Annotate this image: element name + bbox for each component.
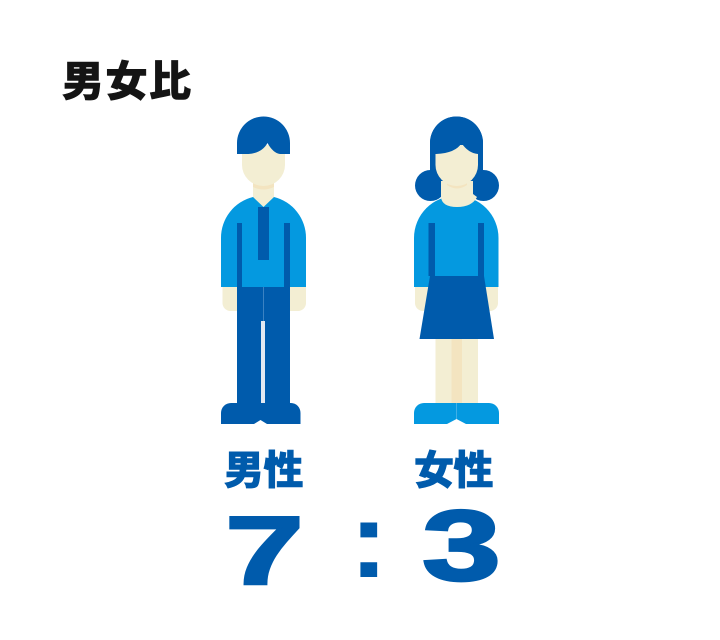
female hair back	[415, 116, 499, 201]
female shoes	[414, 403, 499, 424]
male hair	[237, 116, 290, 154]
male face	[242, 145, 285, 186]
female face	[436, 145, 478, 186]
ratio number 3: 3	[422, 490, 501, 602]
male trousers	[237, 287, 290, 403]
male neck	[253, 175, 274, 209]
female sleeve lines	[428, 223, 484, 276]
female torso	[414, 196, 498, 287]
female hands	[415, 285, 498, 311]
male shoes	[221, 403, 300, 424]
label: female: 女性	[414, 449, 493, 493]
male torso	[221, 197, 306, 287]
ratio number 7: 7	[225, 496, 304, 605]
icon: female figure	[414, 116, 499, 424]
male hands	[222, 285, 306, 311]
male tie and sleeve lines	[237, 207, 290, 287]
ratio colon: :	[349, 480, 389, 601]
female fringe	[430, 116, 483, 154]
female legs	[436, 338, 478, 404]
female neck	[441, 181, 477, 207]
label: male: 男性	[224, 449, 303, 493]
icon: male figure	[221, 116, 306, 424]
title: 男女比	[62, 58, 193, 105]
female skirt	[420, 276, 494, 339]
